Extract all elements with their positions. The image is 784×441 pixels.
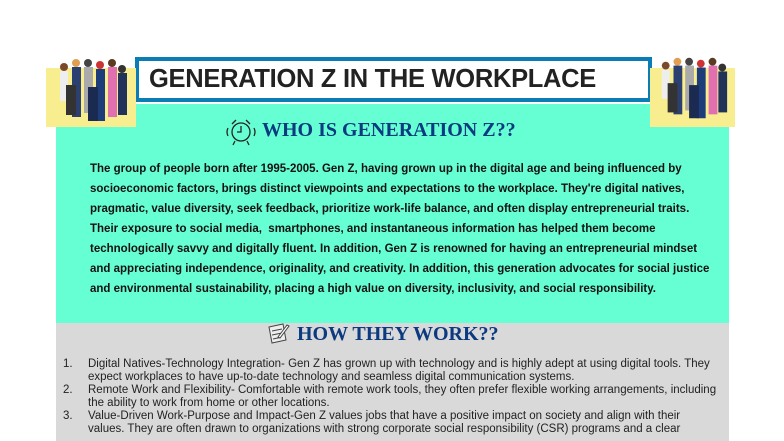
- list: work traits: values. They are often drawn to organizations with strong corporate social responsibility (CSR) programs and a clear: [88, 423, 680, 435]
- panel: how they work: [56, 323, 729, 441]
- text block: description: and appreciating independence, originality, and creativity. In addition, this generation advocates for social justice: [90, 263, 709, 275]
- text block: description: Their exposure to social media, smartphones, and instantaneous information has helped them become: [90, 223, 656, 235]
- title box: [135, 57, 652, 102]
- text block: description: and environmental sustainability, placing a high value on diversity, inclusivity, and social responsibility.: [90, 283, 656, 295]
- text block: description: socioeconomic factors, brings distinct viewpoints and expectations to the workplace. They're digital natives,: [90, 183, 684, 195]
- heading: how they work: HOW THEY WORK??: [297, 323, 499, 345]
- panel: who is generation z: [56, 104, 729, 323]
- list: work traits: expect workplaces to have up-to-date technology and seamless digital communication systems.: [88, 371, 574, 383]
- heading: who is generation z: WHO IS GENERATION Z??: [262, 119, 516, 141]
- list: work traits: [63, 358, 716, 435]
- text block: description: technologically savvy and digitally fluent. In addition, Gen Z is renowned for having an entrepreneurial mindset: [90, 243, 697, 255]
- list: work traits: the ability to work from home or other locations.: [88, 397, 330, 409]
- text block: description: pragmatic, value diversity, seek feedback, prioritize work-life balance, and often display entrepreneurial traits.: [90, 203, 689, 215]
- list: work traits: Value-Driven Work-Purpose and Impact-Gen Z values jobs that have a positive impact on society and align with their: [88, 410, 680, 422]
- title: GENERATION Z IN THE WORKPLACE: [149, 65, 596, 93]
- text block: description: [90, 163, 709, 295]
- list: work traits: Remote Work and Flexibility- Comfortable with remote work tools, they often prefer flexible working arrangements, including: [88, 384, 716, 396]
- list: work traits: Digital Natives-Technology Integration- Gen Z has grown up with technology and is highly adept at using digital tools. They: [88, 358, 710, 370]
- list: work traits: 2.: [63, 384, 73, 396]
- list: work traits: 3.: [63, 410, 73, 422]
- image: people group left: [46, 59, 136, 127]
- icon: alarm clock: [226, 120, 256, 146]
- icon: notepad: [268, 323, 290, 344]
- image: people group right: [650, 58, 735, 127]
- list: work traits: 1.: [63, 358, 73, 370]
- text block: description: The group of people born after 1995-2005. Gen Z, having grown up in the digital age and being influenced by: [90, 163, 682, 175]
